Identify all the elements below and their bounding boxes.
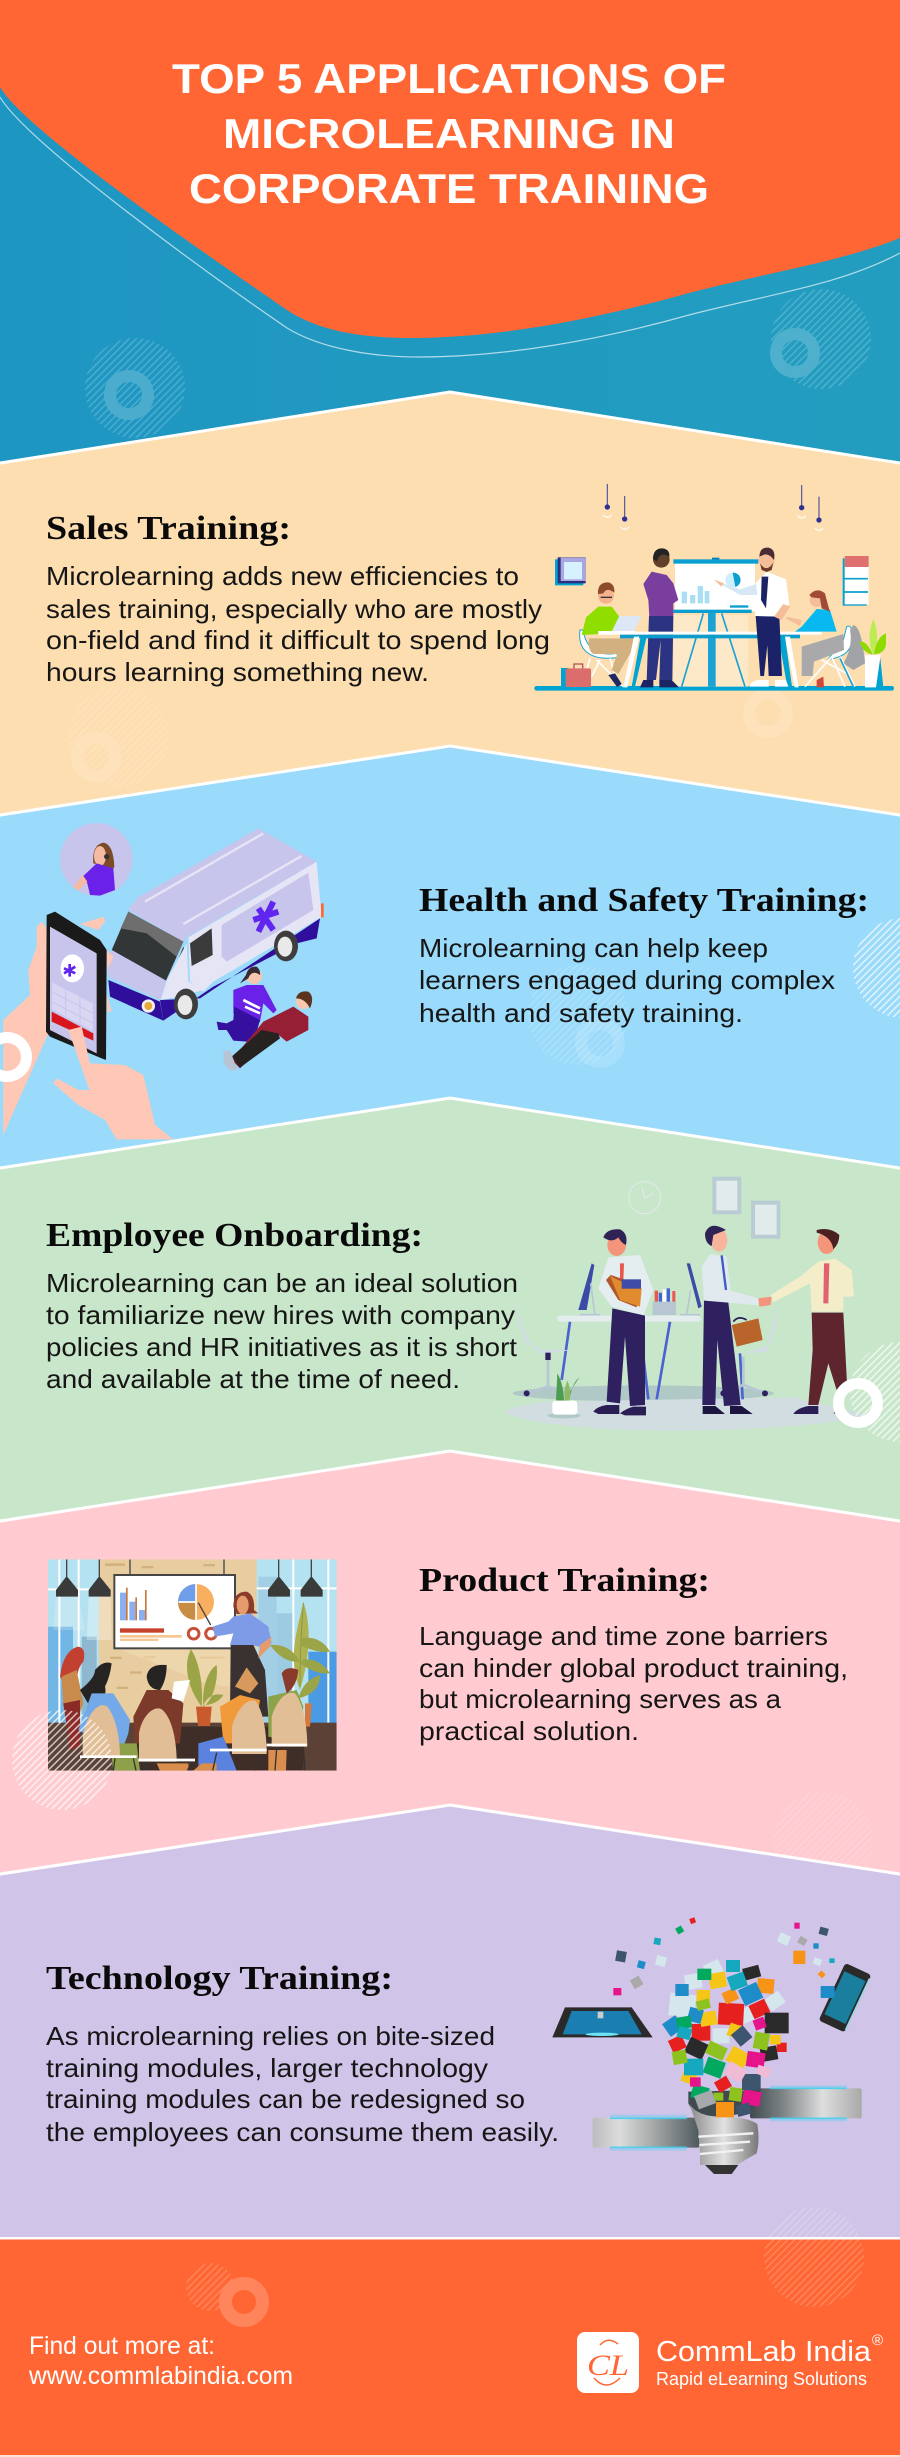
icon: hand holding phone — [3, 912, 173, 1139]
illustration: presentation room — [48, 1559, 337, 1771]
body text: hours learning something new. — [46, 657, 429, 687]
body text — [46, 561, 550, 687]
heading: Technology Training: — [46, 1960, 393, 1997]
body text: learners engaged during complex — [419, 965, 835, 995]
illustration: new hire handshake — [503, 1177, 873, 1431]
panel: employee onboarding — [0, 1098, 900, 1600]
heading: Employee Onboarding: — [46, 1217, 423, 1254]
body text: Language and time zone barriers — [419, 1621, 828, 1651]
body text: training modules, larger technology — [46, 2053, 488, 2083]
body text: As microlearning relies on bite-sized — [46, 2021, 495, 2051]
panel: sales training — [0, 392, 900, 900]
panel: health and safety training — [0, 746, 900, 1250]
decoration: hatched circle and white ring — [838, 1342, 900, 1442]
panel: footer — [0, 2207, 900, 2457]
icon: tablet — [552, 2007, 653, 2037]
title: TOP 5 APPLICATIONS OF — [172, 55, 726, 102]
panel: product training — [0, 1450, 900, 1872]
logo: CommLab India: CommLab India — [656, 2336, 872, 2368]
body text: can hinder global product training, — [419, 1653, 848, 1683]
body text: on-field and find it difficult to spend long — [46, 625, 550, 655]
logo: CommLab India: CL — [587, 2349, 629, 2382]
body text — [46, 1268, 518, 1394]
decoration: white ring — [0, 1038, 26, 1076]
body text: and available at the time of need. — [46, 1364, 460, 1394]
icon: operator avatar — [60, 823, 133, 896]
logo: CommLab India — [577, 2332, 883, 2393]
paramedic and patient — [217, 967, 312, 1071]
heading: Product Training: — [419, 1562, 710, 1599]
header panel — [0, 0, 900, 480]
light rings — [593, 2088, 862, 2148]
body text: Microlearning can help keep — [419, 933, 768, 963]
heading: Health and Safety Training: — [419, 882, 869, 919]
body text — [419, 1621, 848, 1746]
body text: Microlearning can be an ideal solution — [46, 1268, 518, 1298]
body text: health and safety training. — [419, 998, 743, 1028]
decoration: hatched circle and ring — [68, 687, 787, 787]
title: CORPORATE TRAINING — [189, 165, 709, 212]
decoration: hatched circle — [12, 1710, 112, 1810]
body text: Microlearning adds new efficiencies to — [46, 561, 519, 591]
find out more text — [28, 2332, 293, 2390]
illustration: light bulb of apps — [552, 1917, 872, 2174]
illustration: sales team meeting — [534, 484, 894, 691]
logo: CommLab India: ® — [872, 2332, 883, 2349]
decoration: hatched circles — [528, 918, 900, 1065]
ambulance — [107, 828, 324, 1021]
body text: policies and HR initiatives as it is short — [46, 1332, 518, 1362]
body text — [46, 2021, 559, 2147]
decoration: left hatched circle and ring — [85, 338, 185, 438]
decoration: right hatched circle and ring — [771, 289, 871, 389]
title: MICROLEARNING IN — [223, 110, 675, 157]
body text: sales training, especially who are mostly — [46, 594, 542, 624]
white curve line — [0, 97, 900, 357]
find out more text: www.commlabindia.com — [28, 2362, 293, 2390]
orange top shape — [0, 0, 900, 338]
body text: training modules can be redesigned so — [46, 2084, 525, 2114]
panel: technology training — [0, 1805, 900, 2239]
body text: but microlearning serves as a — [419, 1684, 782, 1714]
body text: practical solution. — [419, 1716, 639, 1746]
icon: bulb base — [688, 2090, 760, 2174]
icon: smartphone — [819, 1963, 872, 2033]
illustration: ambulance, paramedic and phone — [3, 823, 324, 1139]
find out more text: Find out more at: — [29, 2332, 215, 2360]
icons: app tiles — [613, 1917, 835, 2117]
title — [172, 55, 726, 212]
body text: the employees can consume them easily. — [46, 2117, 559, 2147]
decoration: faint right circle — [773, 1792, 873, 1892]
logo: CommLab India: Rapid eLearning Solutions — [656, 2369, 867, 2389]
heading: Sales Training: — [46, 510, 291, 547]
body text — [419, 933, 835, 1028]
body text: to familiarize new hires with company — [46, 1300, 515, 1330]
decoration: footer hatched circles — [186, 2207, 864, 2320]
